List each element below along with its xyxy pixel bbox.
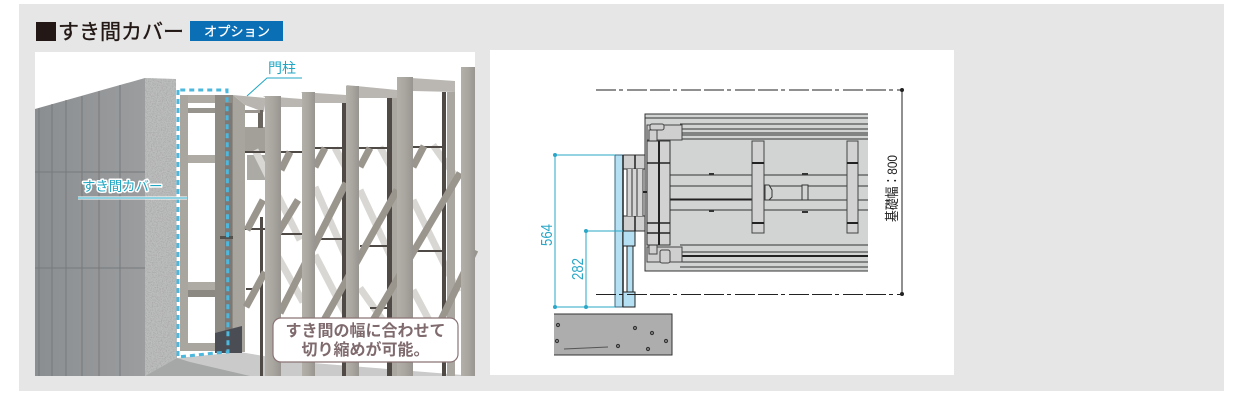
hinge top <box>647 124 682 141</box>
label: cover <box>78 179 187 198</box>
dimension: 282: 282 <box>570 258 587 280</box>
ground <box>35 352 475 376</box>
option badge: オプション <box>204 24 270 39</box>
gate thin light rails <box>392 92 455 376</box>
heading: すき間カバー <box>58 21 184 44</box>
callout <box>273 318 458 362</box>
panel: gate photo <box>35 52 475 376</box>
gate thin dark rails <box>245 92 446 376</box>
callout: すき間の幅に合わせて <box>285 322 446 340</box>
bottom bracket <box>215 326 242 353</box>
latch <box>765 185 808 200</box>
dashed cover outline <box>178 90 228 357</box>
label: gate post <box>247 60 302 96</box>
arm right <box>847 141 858 233</box>
arm center <box>752 141 764 233</box>
gate main verticals <box>265 67 475 376</box>
dimension: 564: 564 <box>539 224 556 246</box>
arm left <box>647 141 670 245</box>
gate body <box>645 114 868 271</box>
gate back diagonals <box>255 145 458 322</box>
option badge <box>190 21 283 41</box>
gate top frames <box>263 77 455 107</box>
masonry wall side <box>145 78 177 376</box>
gap cover blue parts <box>615 155 635 307</box>
label: gate post: 門柱 <box>268 60 296 76</box>
masonry wall front <box>35 78 145 376</box>
fixed post frame <box>180 95 245 352</box>
callout: 切り縮めが可能。 <box>301 340 430 359</box>
foundation dimension end points <box>900 88 904 296</box>
dimension: 564 <box>539 153 615 309</box>
gate front diagonals <box>246 146 475 322</box>
dimension: 282 <box>570 229 623 309</box>
folded panels <box>623 155 647 231</box>
label: cover: すき間カバー <box>82 179 162 194</box>
panel: plan drawing <box>490 50 954 375</box>
bolts <box>709 173 808 213</box>
foundation width lines <box>596 90 902 294</box>
hinge bottom <box>647 245 682 263</box>
first section top and box <box>233 95 266 180</box>
concrete pillar section <box>554 314 672 355</box>
dimension: foundation width: 基礎幅：800 <box>884 155 900 222</box>
